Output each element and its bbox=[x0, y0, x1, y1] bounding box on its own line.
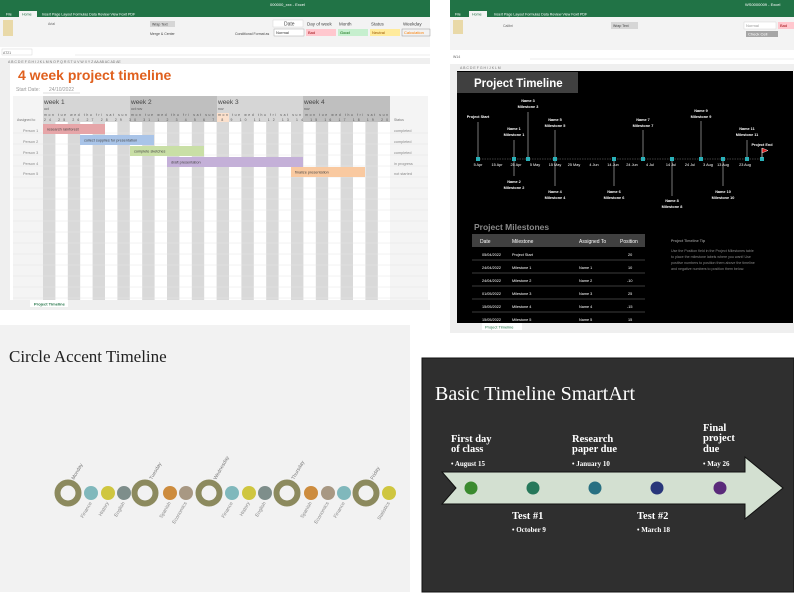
date labels bbox=[474, 163, 751, 167]
milestone labels: Research bbox=[572, 434, 613, 445]
panel: excel 4 week project timeline bbox=[0, 0, 430, 310]
table: milestones: 20 bbox=[628, 253, 632, 257]
table: milestones: Assigned To bbox=[579, 239, 606, 245]
gantt bars: finalize presentation bbox=[295, 170, 329, 174]
table: milestones: Project Start bbox=[512, 253, 534, 257]
formula bar bbox=[0, 47, 430, 64]
formula bar: A B C D E F G H I J K L M bbox=[460, 66, 501, 70]
sheet tab bar: Project Timeline bbox=[485, 324, 514, 330]
panel: circle accent timeline bbox=[0, 325, 410, 592]
day labels: Thursday bbox=[291, 460, 306, 481]
ribbon: Normal bbox=[746, 23, 759, 28]
ribbon: Month bbox=[339, 22, 352, 26]
milestone labels: Final bbox=[703, 423, 726, 434]
milestone labels: Milestone 9 bbox=[691, 115, 711, 119]
gantt bars: draft presentation bbox=[171, 160, 201, 164]
ribbon: Status bbox=[371, 22, 385, 26]
table: milestones: 15/05/2022 bbox=[482, 318, 501, 322]
title: Basic Timeline SmartArt bbox=[435, 383, 635, 405]
title: Circle Accent Timeline bbox=[9, 347, 167, 366]
table: milestones: 05/04/2022 bbox=[482, 253, 501, 257]
table: milestones: Name 1 bbox=[579, 266, 592, 270]
table: milestones: 01/05/2022 bbox=[482, 292, 501, 296]
table: milestones: -10 bbox=[627, 279, 632, 283]
milestone labels: Milestone 4 bbox=[545, 196, 566, 200]
milestone labels: Name 3 bbox=[521, 99, 535, 103]
people and status: Person 5 bbox=[23, 172, 38, 176]
ribbon: Wrap Text bbox=[152, 22, 168, 26]
milestone labels: paper due bbox=[572, 444, 617, 455]
subject labels: Finance bbox=[221, 501, 235, 519]
ribbon: Arial bbox=[48, 22, 55, 26]
excel title bar: Insert Page Layout Formulas Data Review View Foxit PDF bbox=[494, 12, 588, 16]
milestone labels: Name 8 bbox=[665, 199, 679, 203]
small circles bbox=[84, 486, 396, 500]
table: milestones: -15 bbox=[627, 305, 632, 309]
milestone labels: project bbox=[703, 433, 735, 444]
ribbon: Day of week bbox=[307, 22, 333, 26]
table: milestones: Milestone 2 bbox=[512, 279, 531, 283]
subject labels: Economics bbox=[313, 501, 331, 525]
date labels: 25 May bbox=[568, 163, 580, 167]
milestone labels: Milestone 8 bbox=[662, 205, 682, 209]
text block: timeline tip: and negative numbers to position them below. bbox=[671, 267, 744, 271]
excel title bar: WS0000009 - Excel bbox=[745, 2, 780, 7]
excel title bar: File bbox=[6, 12, 12, 16]
date labels: 5 Apr bbox=[474, 163, 483, 167]
table: milestones: Name 2 bbox=[579, 279, 592, 283]
milestone labels: • May 26 bbox=[703, 460, 730, 468]
table: milestones: Milestone 1 bbox=[512, 266, 531, 270]
milestone labels: • January 10 bbox=[572, 460, 610, 468]
people and status: Person 4 bbox=[23, 162, 38, 166]
date labels: 13 Aug bbox=[717, 163, 729, 167]
week headers: week 2 bbox=[130, 99, 152, 106]
ribbon: Weekday bbox=[403, 22, 422, 26]
week headers: oct bbox=[44, 107, 49, 111]
milestone labels: of class bbox=[451, 444, 483, 455]
subject labels: History bbox=[239, 501, 252, 517]
ribbon: Calculation bbox=[404, 30, 424, 35]
subject labels: Spanish bbox=[158, 501, 173, 520]
title box: project timeline: Project Timeline bbox=[474, 78, 563, 90]
milestone labels: First day bbox=[451, 434, 492, 445]
subject labels: History bbox=[98, 501, 111, 517]
heading: project milestones: Project Milestones bbox=[474, 222, 549, 232]
milestone labels: • August 15 bbox=[451, 460, 485, 468]
day labels: Friday bbox=[370, 466, 382, 481]
milestone dots bbox=[464, 482, 726, 494]
week headers: oct nov bbox=[131, 107, 143, 111]
milestone labels: Milestone 3 bbox=[518, 105, 538, 109]
date labels: 24 Jul bbox=[685, 163, 695, 167]
table: milestones: Milestone bbox=[512, 239, 534, 245]
milestone labels: Name 5 bbox=[548, 118, 562, 122]
table: milestones: 24/04/2022 bbox=[482, 279, 501, 283]
milestone labels bbox=[467, 99, 773, 209]
date labels: 14 Jun bbox=[607, 163, 619, 167]
excel title bar bbox=[0, 0, 430, 17]
people and status: in progress bbox=[394, 162, 413, 166]
milestone labels: Name 7 bbox=[636, 118, 650, 122]
table: milestones: 15 bbox=[628, 318, 632, 322]
ribbon: Wrap Text bbox=[613, 24, 629, 28]
people and status: Person 3 bbox=[23, 151, 38, 155]
start date bbox=[16, 87, 80, 93]
text block: timeline tip: Project Timeline Tip bbox=[671, 239, 706, 243]
milestone labels bbox=[451, 423, 735, 534]
excel title bar: 000000_xxx - Excel bbox=[270, 2, 305, 7]
milestone labels: Milestone 10 bbox=[712, 196, 734, 200]
ribbon: Check Cell bbox=[748, 32, 767, 36]
date labels: 15 Apr bbox=[492, 163, 503, 167]
excel title bar: Insert Page Layout Formulas Data Review View Foxit PDF bbox=[42, 12, 136, 16]
table: milestones: 25 bbox=[628, 292, 632, 296]
sheet tab bar bbox=[450, 323, 794, 333]
week headers bbox=[17, 96, 404, 122]
milestone labels: Project Start bbox=[467, 115, 490, 119]
gantt bars: research rainforest bbox=[47, 128, 80, 132]
milestone labels: Name 1 bbox=[507, 127, 521, 131]
milestone labels: Milestone 7 bbox=[633, 124, 653, 128]
milestone labels: Milestone 5 bbox=[545, 124, 565, 128]
date labels: 15 May bbox=[549, 163, 561, 167]
subject labels: Finance bbox=[333, 501, 347, 519]
date labels: 4 Jun bbox=[589, 163, 599, 167]
subject labels: Economics bbox=[171, 501, 189, 525]
week headers: 24 25 26 27 28 29 30 31 1 2 3 4 5 6 7 8 9 10 11 12 13 14 15 16 17 18 19 20 bbox=[44, 118, 388, 122]
timeline axis bbox=[476, 112, 764, 196]
milestone labels: Name 11 bbox=[739, 127, 755, 131]
excel title bar bbox=[450, 0, 794, 17]
milestone labels: Milestone 11 bbox=[736, 133, 758, 137]
sheet tab bar: Project Timeline bbox=[34, 302, 66, 306]
excel title bar: Home bbox=[22, 12, 32, 16]
subject labels: English bbox=[254, 501, 268, 518]
date labels: 3 Aug bbox=[703, 163, 713, 167]
sheet tab bar bbox=[0, 300, 430, 310]
table: milestones: Milestone 5 bbox=[512, 318, 531, 322]
table: milestones: Name 3 bbox=[579, 292, 592, 296]
formula bar: W14 bbox=[453, 55, 460, 59]
formula bar: A B C D E F G H I J K L M N O P Q R S T U V W X Y Z AA AB AC AD AE bbox=[8, 60, 121, 64]
day labels bbox=[71, 455, 382, 481]
ribbon: Bad bbox=[780, 23, 787, 28]
milestone labels: Name 6 bbox=[607, 190, 621, 194]
date labels: 14 Jul bbox=[666, 163, 676, 167]
people and status bbox=[23, 129, 413, 176]
rings bbox=[58, 482, 376, 504]
date labels: 5 May bbox=[530, 163, 540, 167]
milestone labels: due bbox=[703, 444, 720, 455]
table: milestones: Milestone 4 bbox=[512, 305, 531, 309]
ribbon: Calibri bbox=[503, 24, 513, 28]
formula bar bbox=[450, 50, 794, 71]
ribbon: Neutral bbox=[372, 30, 385, 35]
icon: red flag bbox=[762, 148, 768, 158]
date labels: 24 Jun bbox=[626, 163, 638, 167]
dark sheet background bbox=[457, 71, 793, 323]
people and status: Person 2 bbox=[23, 140, 38, 144]
week headers: week 1 bbox=[43, 99, 65, 106]
formula bar: AT21 bbox=[3, 51, 11, 55]
date labels: 25 Apr bbox=[511, 163, 522, 167]
milestone labels: Project End bbox=[751, 143, 773, 147]
table: milestones: Date bbox=[480, 239, 491, 245]
milestone labels: Milestone 2 bbox=[504, 186, 524, 190]
start date: 24/10/2022 bbox=[49, 87, 74, 93]
day labels: Monday bbox=[71, 462, 85, 481]
subject labels: Statistics bbox=[377, 501, 392, 521]
milestone labels: Name 10 bbox=[715, 190, 731, 194]
gantt grid bbox=[13, 96, 428, 300]
people and status: completed bbox=[394, 140, 412, 144]
week headers: nov bbox=[218, 107, 224, 111]
milestone labels: Test #1 bbox=[512, 511, 543, 522]
week headers: mon tue wed thu fri sat sun mon tue wed thu fri sat sun mon tue wed thu fri sat sun mon tue wed thu fri sat sun bbox=[44, 113, 388, 117]
text block: timeline tip: to place the milestone labels where you want! Use bbox=[671, 255, 751, 259]
week headers: nov bbox=[304, 107, 310, 111]
table: milestones bbox=[472, 234, 645, 322]
start date: Start Date: bbox=[16, 87, 40, 93]
week headers: week 3 bbox=[217, 99, 239, 106]
panel: excel project timeline dark bbox=[450, 0, 794, 333]
week headers: Status bbox=[394, 118, 404, 122]
gantt bars bbox=[43, 124, 365, 177]
people and status: not started bbox=[394, 172, 412, 176]
subject labels bbox=[80, 501, 392, 525]
milestone labels: • October 9 bbox=[512, 526, 546, 534]
text block: timeline tip bbox=[671, 239, 755, 271]
title box: project timeline bbox=[457, 72, 578, 93]
people and status: completed bbox=[394, 129, 412, 133]
milestone labels: • March 18 bbox=[637, 526, 671, 534]
milestone labels: Milestone 6 bbox=[604, 196, 624, 200]
date labels: 4 Jul bbox=[646, 163, 654, 167]
ribbon: Merge & Center bbox=[150, 32, 176, 36]
milestone labels: Test #2 bbox=[637, 511, 668, 522]
people and status: Person 1 bbox=[23, 129, 38, 133]
table: milestones: Milestone 3 bbox=[512, 292, 531, 296]
milestone labels: Name 4 bbox=[548, 190, 563, 194]
table: milestones: 24/04/2022 bbox=[482, 266, 501, 270]
ribbon: Bad bbox=[308, 30, 315, 35]
people and status: completed bbox=[394, 151, 412, 155]
gantt bars: complete sketches bbox=[134, 150, 166, 154]
table: milestones: Name 5 bbox=[579, 318, 592, 322]
milestone labels: Name 2 bbox=[507, 180, 521, 184]
subject labels: English bbox=[113, 501, 127, 518]
week headers: Assigned to bbox=[17, 118, 35, 122]
day labels: Wednesday bbox=[213, 455, 231, 481]
title: 4 week project timeline: 4 week project timeline bbox=[18, 67, 171, 83]
week headers: week 4 bbox=[303, 99, 325, 106]
ribbon: Normal bbox=[276, 30, 289, 35]
excel title bar: File bbox=[455, 12, 461, 16]
ribbon bbox=[450, 17, 794, 50]
ribbon: Conditional Format as bbox=[235, 32, 269, 36]
table: milestones: Name 4 bbox=[579, 305, 592, 309]
gantt bars: collect supplies for presentation bbox=[84, 138, 137, 142]
text block: timeline tip: positive numbers to position them above the timeline bbox=[671, 261, 755, 265]
day labels: Tuesday bbox=[149, 461, 163, 481]
text block: timeline tip: Use the Position field in the Project Milestones table bbox=[671, 249, 754, 253]
milestone labels: Name 9 bbox=[694, 109, 708, 113]
subject labels: Finance bbox=[80, 501, 94, 519]
table: milestones: Position bbox=[620, 239, 638, 245]
date labels: 23 Aug bbox=[739, 163, 751, 167]
panel: basic timeline smartart bbox=[422, 358, 794, 592]
ribbon: Date bbox=[284, 22, 295, 28]
excel title bar: Home bbox=[472, 12, 482, 16]
milestone labels: Milestone 1 bbox=[504, 133, 524, 137]
row header strip bbox=[0, 64, 10, 300]
ribbon: Good bbox=[340, 30, 350, 35]
subject labels: Spanish bbox=[299, 501, 314, 520]
table: milestones: 10 bbox=[628, 266, 632, 270]
ribbon bbox=[0, 17, 430, 47]
table: milestones: 15/05/2022 bbox=[482, 305, 501, 309]
arrow bbox=[442, 457, 783, 519]
